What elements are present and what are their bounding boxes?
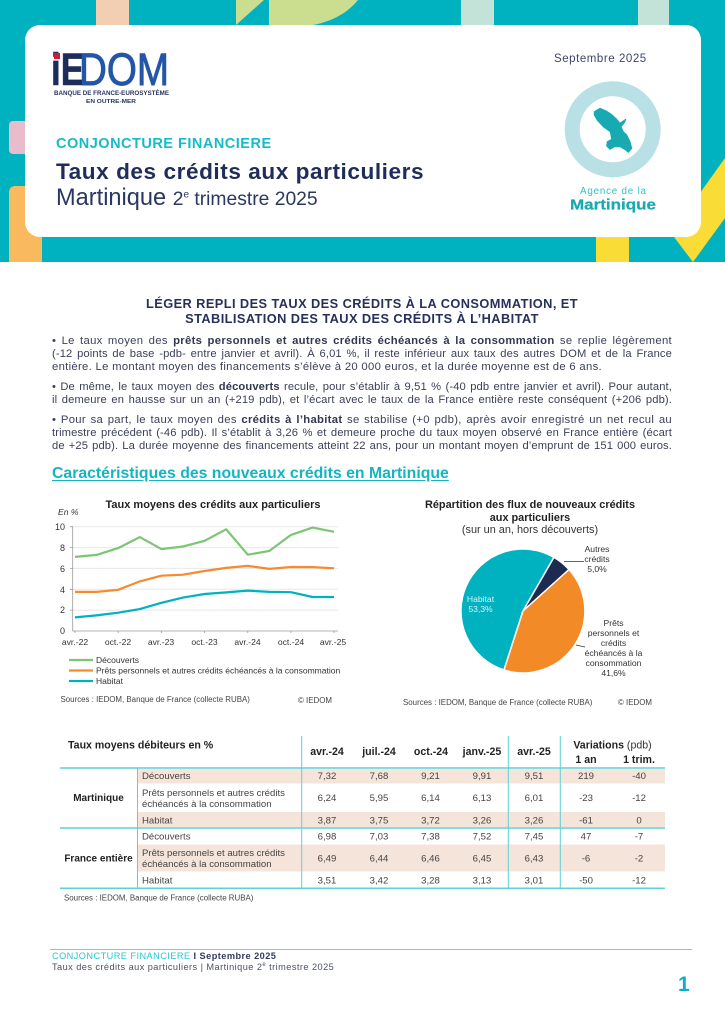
row values: 3,72 — [421, 816, 440, 826]
title: Taux des crédits aux particuliers — [56, 159, 424, 184]
chart title: (sur un an, hors découverts) — [462, 524, 598, 536]
row values: 3,51 — [318, 876, 336, 886]
row values: 9,21 — [421, 771, 440, 782]
row values: -12 — [632, 876, 646, 886]
legend: Habitat — [96, 676, 124, 686]
table header: Variations (pdb) — [573, 740, 652, 752]
header card — [24, 25, 701, 237]
row values: 6,43 — [525, 854, 543, 864]
section heading: Caractéristiques des nouveaux crédits en Martinique — [52, 464, 449, 482]
row values — [318, 771, 646, 886]
pie chart: new credit flows — [403, 499, 652, 707]
row values: 6,13 — [473, 793, 491, 804]
slice: habitat — [461, 549, 554, 670]
agency badge: Martinique — [564, 81, 661, 214]
row shading — [138, 769, 665, 872]
chart title: aux particuliers — [490, 512, 570, 524]
legend — [69, 655, 341, 686]
pie chart: new credit flows: Habitat — [467, 594, 495, 604]
row group labels — [64, 793, 133, 864]
pie chart: new credit flows: Autres — [585, 544, 609, 554]
line chart: average rates: avr.-24 — [234, 637, 261, 647]
footer text: CONJONCTURE FINANCIERE I Septembre 2025 — [52, 951, 276, 961]
line chart: average rates: avr.-25 — [320, 637, 346, 647]
row values: 7,52 — [473, 832, 491, 842]
footer text: Taux des crédits aux particuliers | Martinique 2e trimestre 2025 — [52, 962, 334, 972]
subtitle: Martinique 2e trimestre 2025 — [56, 185, 318, 211]
row values: 6,44 — [370, 854, 389, 864]
table header — [68, 740, 655, 766]
icon: Martinique island — [594, 108, 632, 152]
row values: 6,98 — [318, 832, 336, 842]
chart title: Répartition des flux de nouveaux crédits — [425, 499, 635, 511]
row values: 3,75 — [370, 816, 388, 826]
row values: 3,26 — [525, 816, 543, 826]
line chart: average rates: avr.-23 — [148, 637, 174, 647]
agency badge: Martinique: Agence de la — [580, 186, 647, 197]
text: entière. Le montant moyen des financements s’élève à 20 000 euros, et la durée moyenne est de 6 ans. — [52, 360, 602, 372]
pie chart: new credit flows: personnels et — [588, 628, 640, 638]
row values: 3,26 — [473, 816, 491, 826]
row values: -40 — [632, 771, 646, 782]
line chart: average rates: En % — [58, 507, 79, 517]
row values: 5,95 — [370, 793, 388, 804]
table header: Taux moyens débiteurs en % — [68, 740, 214, 752]
agency badge: Martinique: Martinique — [570, 196, 656, 214]
text: • Le taux moyen des prêts personnels et autres crédits échéancés à la consommation se replie légèrement — [52, 335, 672, 347]
table header: avr.-25 — [517, 746, 551, 758]
row values: -2 — [635, 854, 643, 864]
pie chart: new credit flows: 41,6% — [601, 668, 626, 678]
row values: 3,01 — [525, 876, 543, 886]
row values: 6,45 — [473, 854, 491, 864]
line chart: average rates: oct.-23 — [191, 637, 218, 647]
series: habitat — [75, 591, 334, 617]
chart title — [425, 499, 635, 536]
slice: prêts personnels — [504, 570, 585, 673]
row values: 3,28 — [421, 876, 440, 886]
source: Sources : IEDOM, Banque de France (collecte RUBA) — [403, 698, 593, 707]
row values: 6,14 — [421, 793, 440, 804]
row labels — [142, 771, 285, 886]
text: • Pour sa part, le taux moyen des crédits à l’habitat se stabilise (+0 pdb), après avoir enregistré un net recul au — [52, 414, 672, 426]
row group labels: France entière — [64, 854, 133, 864]
row values: -50 — [579, 876, 593, 886]
row values: 6,49 — [318, 854, 336, 864]
pie chart: new credit flows: crédits — [584, 554, 610, 564]
line chart: average rates: oct.-24 — [278, 637, 304, 647]
row labels: Découverts — [142, 832, 191, 842]
line chart: average rates: 4 — [60, 585, 65, 595]
line chart: average rates: oct.-22 — [105, 637, 131, 647]
pie chart: new credit flows: Prêts — [603, 618, 624, 628]
table header: avr.-24 — [310, 746, 344, 758]
line chart: average rates: © IEDOM — [298, 696, 332, 705]
row values: -6 — [582, 854, 590, 864]
summary heading — [146, 296, 578, 326]
text: • De même, le taux moyen des découverts recule, pour s’établir à 9,51 % (-40 pdb entre janvier et avril). Pour autant, — [52, 381, 672, 393]
page number: 1 — [678, 973, 690, 996]
table header: oct.-24 — [414, 746, 448, 758]
eyebrow heading: CONJONCTURE FINANCIERE — [56, 136, 272, 152]
line chart: average rates — [55, 499, 346, 705]
row values: 219 — [578, 771, 594, 782]
header band with decorative shapes — [0, 0, 725, 262]
table header: janv.-25 — [462, 746, 501, 758]
row values: -23 — [579, 793, 593, 804]
row labels: Prêts personnels et autres crédits — [142, 788, 285, 799]
row values: 7,38 — [421, 832, 440, 842]
row values: -61 — [579, 816, 593, 826]
row values: 9,51 — [525, 771, 543, 782]
row values: -7 — [635, 832, 643, 842]
row values: 3,42 — [370, 876, 388, 886]
date: Septembre 2025 — [554, 53, 647, 65]
slice: autres crédits — [523, 557, 569, 611]
row labels: Prêts personnels et autres crédits — [142, 848, 285, 859]
line chart: average rates: 6 — [60, 564, 65, 574]
pie chart: new credit flows: crédits — [601, 638, 626, 648]
paragraph: housing — [52, 414, 672, 452]
row values: 3,13 — [473, 876, 491, 886]
logo: IEDOM — [51, 44, 169, 105]
series: découverts — [75, 528, 334, 557]
pie chart: new credit flows: consommation — [586, 658, 642, 668]
footer text — [52, 951, 334, 972]
row group labels: Martinique — [73, 793, 124, 804]
row labels: Habitat — [142, 816, 173, 826]
table header: 1 trim. — [623, 754, 655, 766]
pie chart: new credit flows: 5,0% — [587, 564, 607, 574]
row values: 7,68 — [370, 771, 388, 782]
text: (-12 points de base -pdb- entre janvier et avril). À 6,01 %, il reste inférieur aux taux des autres DOM et de la France — [52, 348, 672, 360]
line chart: average rates: 8 — [60, 543, 65, 553]
row values: 0 — [636, 816, 642, 826]
table header: juil.-24 — [361, 746, 396, 758]
series: prêts personnels — [75, 566, 334, 592]
summary heading: LÉGER REPLI DES TAUX DES CRÉDITS À LA CONSOMMATION, ET — [146, 296, 578, 311]
logo: IEDOM: BANQUE DE FRANCE-EUROSYSTÈME — [54, 89, 169, 97]
pie chart: new credit flows: échéancés à la — [585, 648, 643, 658]
chart title: Taux moyens des crédits aux particuliers — [106, 499, 320, 511]
legend: Découverts — [96, 655, 139, 665]
footer rule — [50, 948, 692, 950]
line chart: average rates: 0 — [60, 626, 65, 636]
row labels: Habitat — [142, 876, 173, 886]
line chart: average rates: 2 — [60, 605, 65, 615]
logo: IEDOM: EN OUTRE-MER — [86, 99, 136, 105]
pie chart: new credit flows: © IEDOM — [618, 698, 652, 707]
table header: 1 an — [575, 754, 597, 766]
row values: 47 — [581, 832, 591, 842]
text: de +25 pdb). La durée moyenne des financements atteint 22 ans, pour un montant moyen d’emprunt de 151 000 euros. — [52, 440, 672, 452]
row values: -12 — [632, 793, 646, 804]
row values: 7,32 — [318, 771, 336, 782]
summary heading: STABILISATION DES TAUX DES CRÉDITS À L’HABITAT — [185, 311, 539, 326]
row values: 9,91 — [473, 771, 491, 782]
line chart: average rates: 10 — [55, 522, 65, 532]
row values: 7,45 — [525, 832, 543, 842]
row values: 6,01 — [525, 793, 543, 804]
paragraph: consumer loans — [52, 335, 672, 372]
pie chart: new credit flows: 53,3% — [468, 604, 493, 614]
paragraph: overdrafts — [52, 381, 672, 406]
logo: IEDOM: DOM — [79, 44, 169, 95]
text: il demeure en hausse sur un an (+219 pdb), et l’écart avec le taux de la France entière reste conséquent (+206 pdb). — [52, 394, 672, 406]
logo: IEDOM: iE — [51, 44, 84, 95]
line chart: average rates: avr.-22 — [62, 637, 88, 647]
row values: 3,87 — [318, 816, 336, 826]
table source: Sources : IEDOM, Banque de France (collecte RUBA) — [64, 894, 254, 902]
row values: 6,24 — [318, 793, 337, 804]
row labels: Découverts — [142, 771, 191, 782]
source: Sources : IEDOM, Banque de France (collecte RUBA) — [60, 695, 250, 704]
row labels: échéancés à la consommation — [142, 859, 272, 870]
text: trimestre précédent (-46 pdb). Il s’établit à 3,26 % et demeure proche du taux moyen observé en France entière (écart — [52, 427, 672, 439]
row values: 6,46 — [421, 854, 440, 864]
row labels: échéancés à la consommation — [142, 799, 272, 810]
legend: Prêts personnels et autres crédits échéancés à la consommation — [96, 666, 341, 676]
table rules — [60, 736, 665, 888]
row values: 7,03 — [370, 832, 388, 842]
